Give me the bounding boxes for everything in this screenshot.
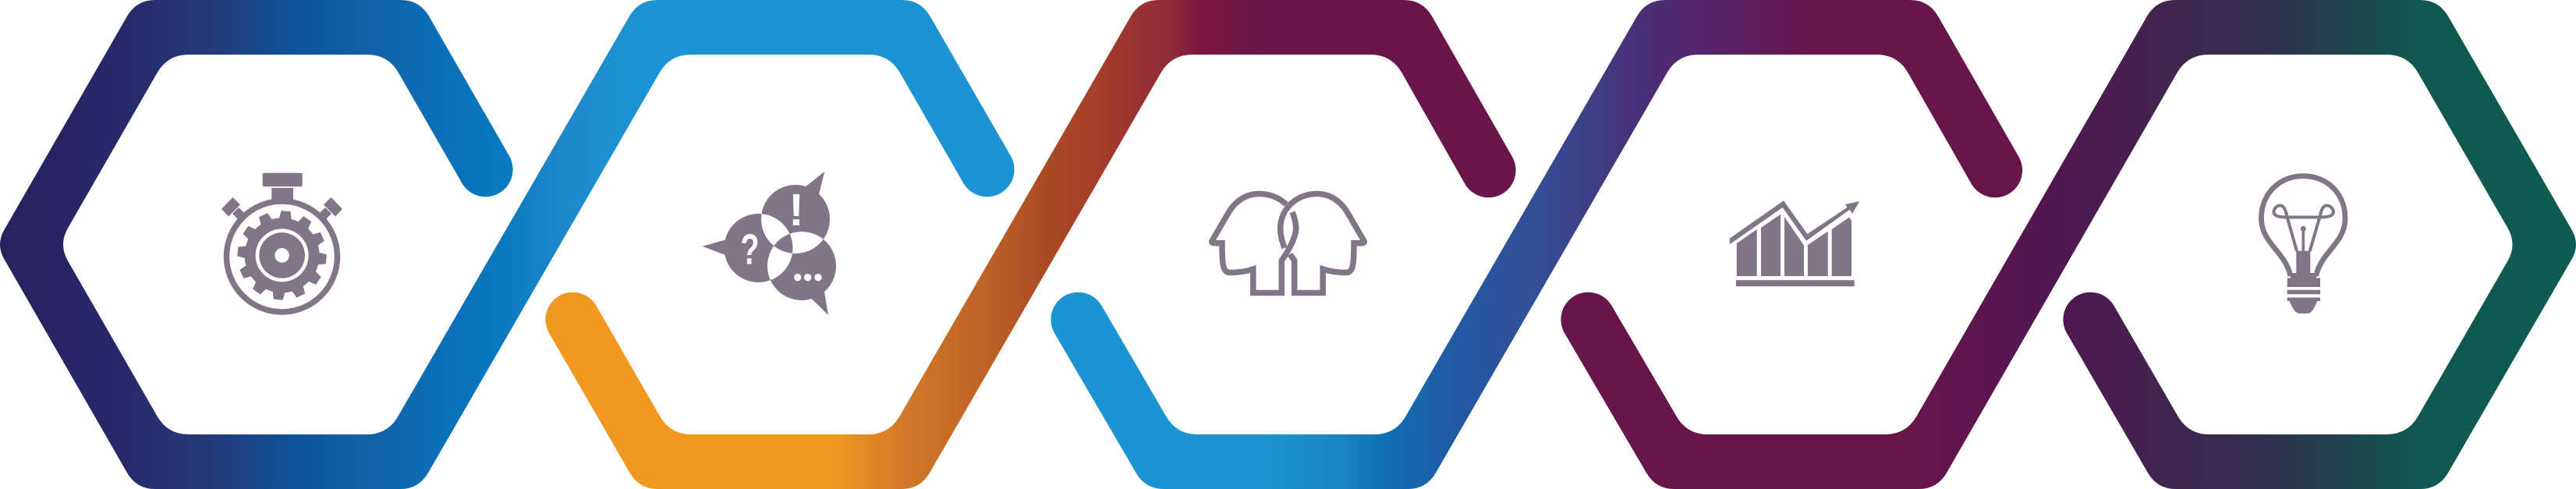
icon: bar chart with rising arrow (1730, 200, 1859, 286)
icon: three overlapping speech bubbles: ! (788, 185, 804, 236)
icon: light bulb (2262, 176, 2345, 314)
icon: three overlapping speech bubbles: ? (740, 226, 760, 274)
ribbon: bottom of hexagon 2 joined to top of hexagon 3 (545, 0, 1516, 489)
ribbon: bottom of hexagon 3 joined to top of hexagon 4 (1051, 0, 2022, 489)
ribbon: bottom of hexagon 4 joined to hexagon 5 (1561, 0, 2576, 489)
icon: two intertwined heads (1212, 193, 1364, 293)
icon: stopwatch with gear (221, 173, 342, 312)
ribbon: hexagon 1 joined to top of hexagon 2 (0, 0, 1015, 489)
icon: three overlapping speech bubbles (703, 172, 836, 315)
